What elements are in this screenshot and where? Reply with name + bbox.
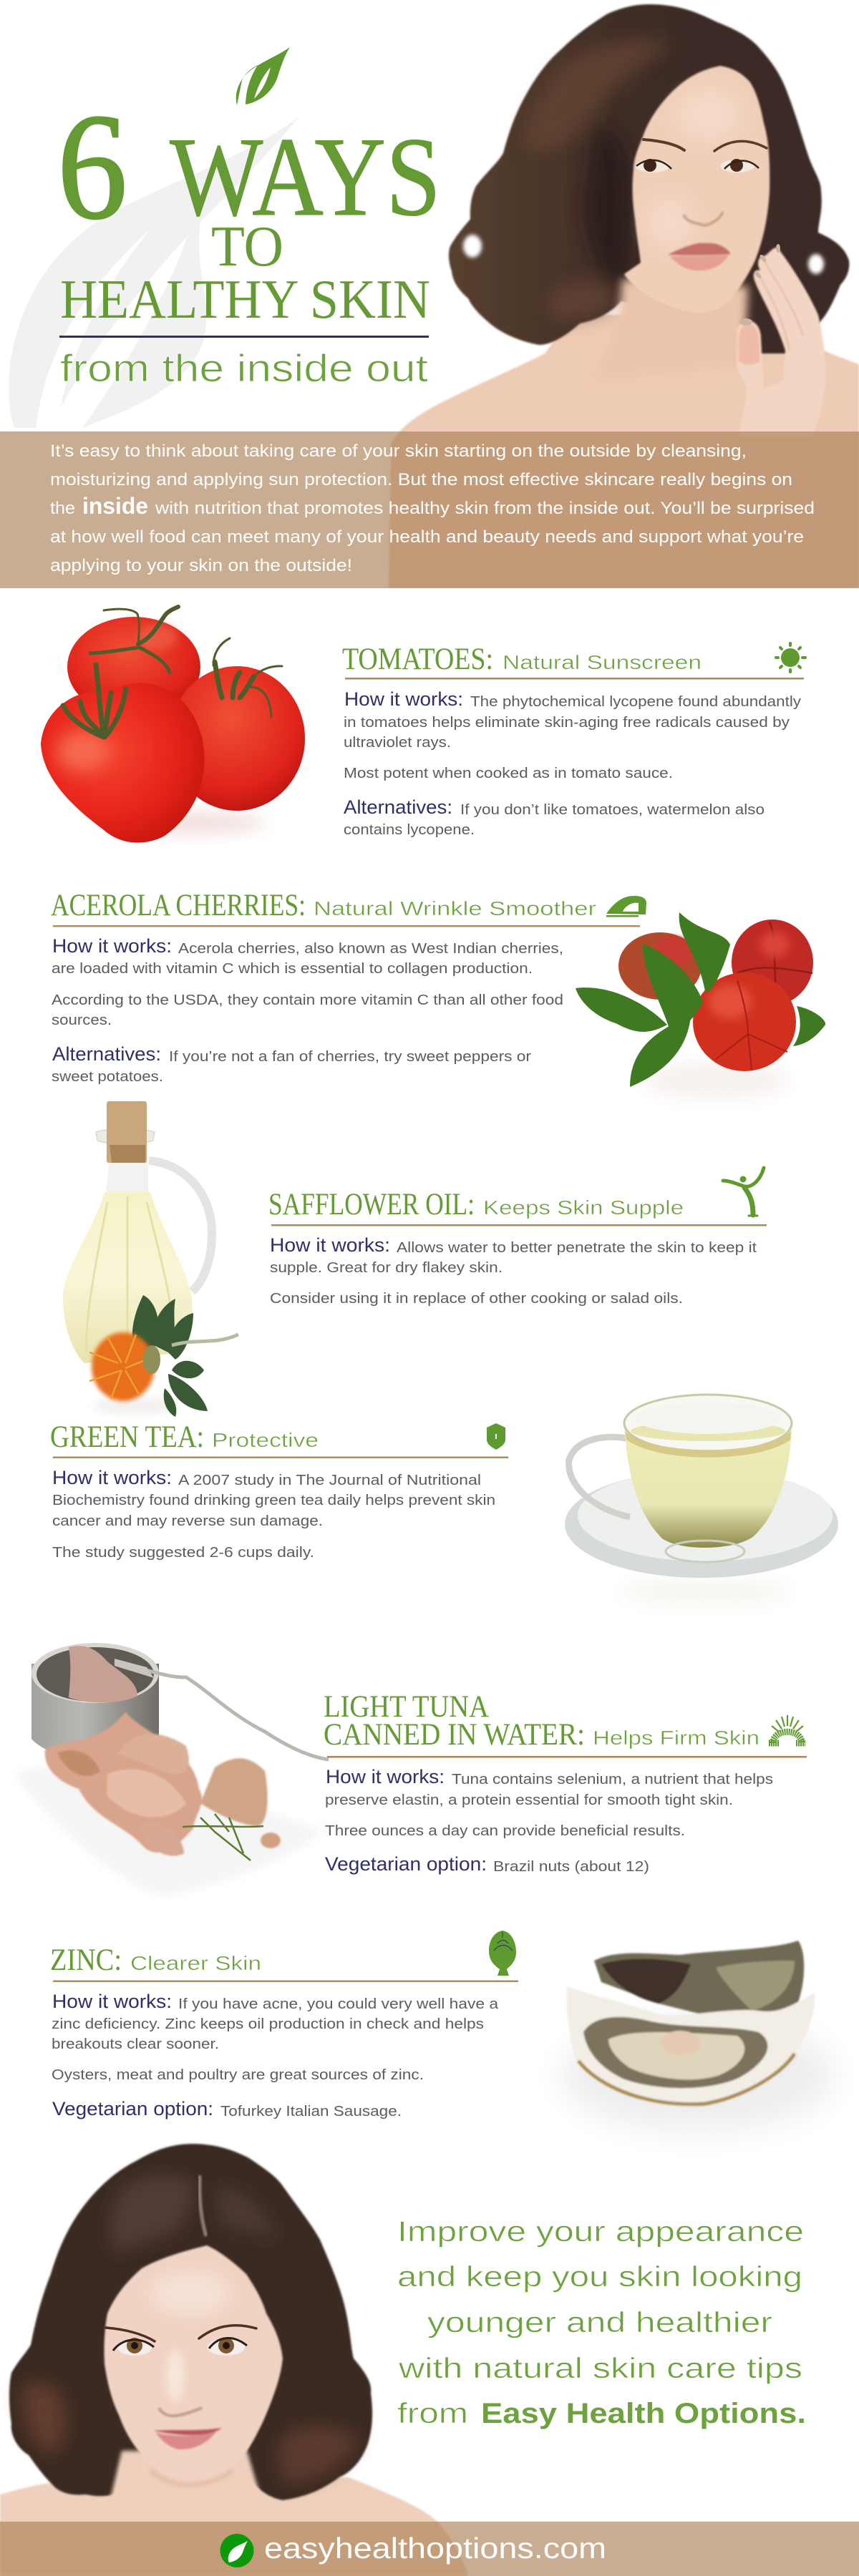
photo: safflower oil bottle <box>63 1101 238 1417</box>
text: zinc: breakouts clear sooner. <box>52 2036 219 2052</box>
photo: woman top <box>389 4 859 588</box>
closing text: Easy Health Options. <box>481 2398 806 2429</box>
icon: dancer <box>723 1168 764 1216</box>
text: zinc: zinc deficiency. Zinc keeps oil production in check and helps <box>52 2016 484 2032</box>
photo: oyster <box>562 1941 834 2132</box>
heading: zinc: Clearer Skin <box>130 1952 261 1974</box>
photo: tomatoes <box>41 607 305 843</box>
title block: TO <box>211 215 283 278</box>
hair <box>9 2144 372 2500</box>
text: acerola cherries: are loaded with vitamin C which is essential to collagen production. <box>52 961 533 977</box>
fingernails <box>739 244 780 326</box>
photo: acerola cherries <box>576 912 825 1098</box>
heading: green tea <box>50 1420 319 1454</box>
text: tomatoes: Alternatives: <box>344 796 452 818</box>
heading: tomatoes <box>342 643 702 676</box>
heading: green tea: GREEN TEA: <box>50 1420 204 1454</box>
text: acerola cherries: Alternatives: <box>52 1043 161 1065</box>
icon: title leaf <box>236 47 290 105</box>
text: light tuna: preserve elastin, a protein essential for smooth tight skin. <box>325 1792 733 1808</box>
intro text: with nutrition that promotes healthy skin from the inside out. You’ll be surprised <box>155 499 815 518</box>
text: safflower oil: How it works: <box>270 1234 390 1256</box>
nose <box>159 2408 202 2416</box>
hair <box>449 4 849 353</box>
intro text: moisturizing and applying sun protection. But the most effective skincare really begins on <box>50 470 792 489</box>
nose <box>684 212 723 225</box>
heading: safflower oil: Keeps Skin Supple <box>483 1196 684 1219</box>
title block: 6 <box>57 82 127 250</box>
text: acerola cherries: sources. <box>52 1013 112 1028</box>
eyes <box>113 2338 247 2356</box>
heading: tomatoes: TOMATOES: <box>342 643 493 676</box>
text: acerola cherries: sweet potatoes. <box>52 1069 163 1085</box>
icon: tree <box>489 1931 516 1976</box>
face highlights <box>150 2272 229 2315</box>
text: tomatoes: How it works: <box>344 688 463 710</box>
text: safflower oil: Consider using it in replace of other cooking or salad oils. <box>270 1291 683 1307</box>
text: green tea: A 2007 study in The Journal of Nutritional <box>178 1473 481 1488</box>
title block: HEALTHY SKIN <box>60 268 430 330</box>
hair highlights <box>21 2175 358 2483</box>
title block: WAYS <box>170 114 441 240</box>
eyes <box>636 159 759 172</box>
text: acerola cherries: How it works: <box>52 935 172 957</box>
heading: zinc: ZINC: <box>50 1943 122 1977</box>
neck <box>107 2451 265 2512</box>
heading: tomatoes: Natural Sunscreen <box>503 651 702 673</box>
lips <box>153 2428 222 2449</box>
text: tomatoes: The phytochemical lycopene found abundantly <box>470 694 801 710</box>
shoulders <box>0 2477 468 2576</box>
text: acerola cherries: According to the USDA, they contain more vitamin C than all other food <box>52 992 563 1008</box>
heading: safflower oil <box>268 1188 684 1221</box>
text: green tea <box>52 1467 495 1561</box>
text: tomatoes: contains lycopene. <box>344 822 475 838</box>
hair highlights <box>523 40 673 319</box>
intro text: inside <box>82 493 148 519</box>
text: tomatoes: If you don’t like tomatoes, watermelon also <box>460 802 765 818</box>
text: acerola cherries: Acerola cherries, also known as West Indian cherries, <box>178 941 563 957</box>
text: tomatoes <box>344 688 801 838</box>
intro text <box>50 441 815 575</box>
hand <box>737 248 825 436</box>
intro band <box>0 431 859 588</box>
text: light tuna: Tuna contains selenium, a nutrient that helps <box>452 1772 773 1787</box>
intro text: It’s easy to think about taking care of your skin starting on the outside by cleansing, <box>50 441 747 461</box>
title block: from the inside out <box>60 347 428 390</box>
lips <box>668 243 731 270</box>
icon: iron <box>606 896 646 917</box>
heading: green tea: Protective <box>212 1429 319 1451</box>
text: safflower oil: supple. Great for dry flakey skin. <box>270 1260 503 1276</box>
neck <box>594 279 748 379</box>
closing text: younger and healthier <box>427 2307 772 2338</box>
photo: green tea cup <box>565 1395 838 1605</box>
chin shadow <box>150 2470 233 2484</box>
text: safflower oil <box>270 1234 757 1307</box>
text: tomatoes: Most potent when cooked as in tomato sauce. <box>344 766 673 781</box>
footer band <box>0 2522 859 2576</box>
text: green tea: How it works: <box>52 1467 172 1488</box>
closing text: from <box>397 2398 468 2429</box>
heading: zinc <box>50 1943 261 1977</box>
heading: acerola cherries <box>51 889 596 922</box>
closing text: and keep you skin looking <box>397 2261 802 2293</box>
text: zinc: Tofurkey Italian Sausage. <box>220 2104 402 2119</box>
background leaf watermark <box>9 117 299 428</box>
icon: palm arcs <box>769 1715 805 1743</box>
heading: light tuna: Helps Firm Skin <box>593 1727 759 1749</box>
heading: safflower oil: SAFFLOWER OIL: <box>268 1188 475 1221</box>
text: zinc: How it works: <box>52 1991 172 2012</box>
brows <box>644 140 767 151</box>
shoulders and chest <box>389 315 859 588</box>
text: light tuna: How it works: <box>326 1766 445 1787</box>
heading: light tuna: LIGHT TUNA <box>324 1690 489 1724</box>
text: zinc: If you have acne, you could very well have a <box>178 1996 499 2012</box>
photo: canned tuna <box>14 1643 329 1896</box>
text: light tuna <box>325 1766 773 1875</box>
text: green tea: Biochemistry found drinking green tea daily helps prevent skin <box>52 1493 495 1508</box>
intro text: the <box>50 499 75 518</box>
intro text: applying to your skin on the outside! <box>50 556 352 575</box>
face highlights <box>680 92 737 137</box>
icon: shield <box>487 1423 505 1450</box>
text: acerola cherries: If you’re not a fan of cherries, try sweet peppers or <box>169 1049 531 1065</box>
text: light tuna: Brazil nuts (about 12) <box>493 1859 649 1875</box>
text: zinc <box>52 1991 499 2119</box>
text: tomatoes: ultraviolet rays. <box>344 735 451 751</box>
title block <box>57 47 441 390</box>
intro text: at how well food can meet many of your health and beauty needs and support what you’re <box>50 527 804 547</box>
text: acerola cherries <box>52 935 563 1085</box>
tomato stems <box>63 607 282 737</box>
photo: woman bottom <box>0 2144 468 2576</box>
closing text <box>397 2216 806 2429</box>
heading: acerola cherries: ACEROLA CHERRIES: <box>51 889 306 922</box>
curl gaps <box>463 235 482 258</box>
text: zinc: Oysters, meat and poultry are great sources of zinc. <box>52 2067 424 2083</box>
text: zinc: Vegetarian option: <box>52 2098 213 2119</box>
closing text: Improve your appearance <box>397 2216 804 2248</box>
text: light tuna: Three ounces a day can provide beneficial results. <box>325 1823 685 1839</box>
text: tomatoes: in tomatoes helps eliminate skin-aging free radicals caused by <box>344 715 790 731</box>
text: green tea: The study suggested 2-6 cups daily. <box>52 1545 314 1561</box>
text: green tea: cancer and may reverse sun damage. <box>52 1513 323 1529</box>
face <box>624 66 770 313</box>
text: light tuna: Vegetarian option: <box>325 1853 487 1875</box>
icon: logo circle <box>220 2534 253 2567</box>
footer band: easyhealthoptions.com <box>264 2532 606 2565</box>
closing text: with natural skin care tips <box>398 2353 802 2384</box>
heading: light tuna <box>324 1690 759 1752</box>
text: safflower oil: Allows water to better penetrate the skin to keep it <box>397 1240 757 1256</box>
heading: acerola cherries: Natural Wrinkle Smoother <box>314 897 596 919</box>
heading: light tuna: CANNED IN WATER: <box>324 1718 585 1752</box>
icon: sun <box>776 643 805 672</box>
brows <box>106 2326 256 2341</box>
face <box>104 2245 283 2483</box>
